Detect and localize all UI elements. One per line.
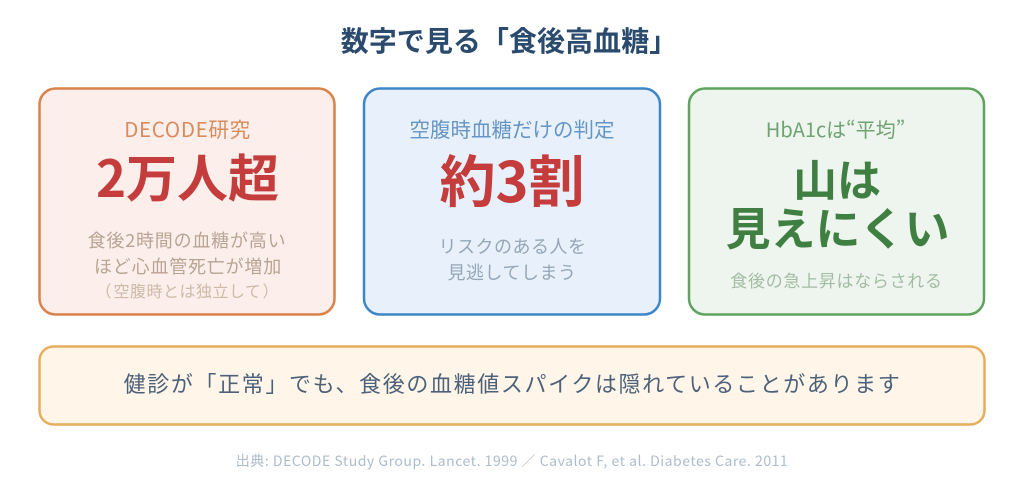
description: DECODE: ほど心血管死亡が増加 [94,253,282,279]
panel label: HbA1c: HbA1cは“平均” [766,114,905,143]
big text: peaks hard to see: 見えにくい [725,193,950,258]
source citation: 出典: DECODE Study Group. Lancet. 1999 ／ Cavalot F, et al. Diabetes Care. 2011 [236,451,788,471]
description: DECODE: 食後2時間の血糖が高い [88,227,286,253]
panel: DECODE study [40,88,334,314]
description: DECODE: ） [262,278,279,302]
big text: peaks hard to see [725,145,950,258]
description: DECODE: 空腹時とは独立して [113,278,262,302]
callout banner: 健診が「正常」でも、食後の血糖値スパイクは隠れていることがあります [124,367,901,399]
panel: HbA1c [689,88,984,314]
description: fasting: 見逃してしまう [448,259,576,285]
big text: peaks hard to see: 山は [793,145,881,209]
callout banner [40,346,984,424]
title: 数字で見る「食後高血糖」 [341,20,677,60]
panel label: fasting: 空腹時血糖だけの判定 [410,113,614,143]
description: fasting: リスクのある人を [438,233,586,259]
description: DECODE: （ [96,278,112,302]
big number: about 30%: 約3割 [439,138,585,219]
panel: fasting glucose [364,88,660,314]
description: HbA1c: 食後の急上昇はならされる [730,267,943,292]
panel label: DECODE: DECODE研究 [124,113,251,143]
description: DECODE [88,227,286,302]
description: fasting [438,233,586,285]
big number: over 20,000: 2万人超 [96,138,279,212]
